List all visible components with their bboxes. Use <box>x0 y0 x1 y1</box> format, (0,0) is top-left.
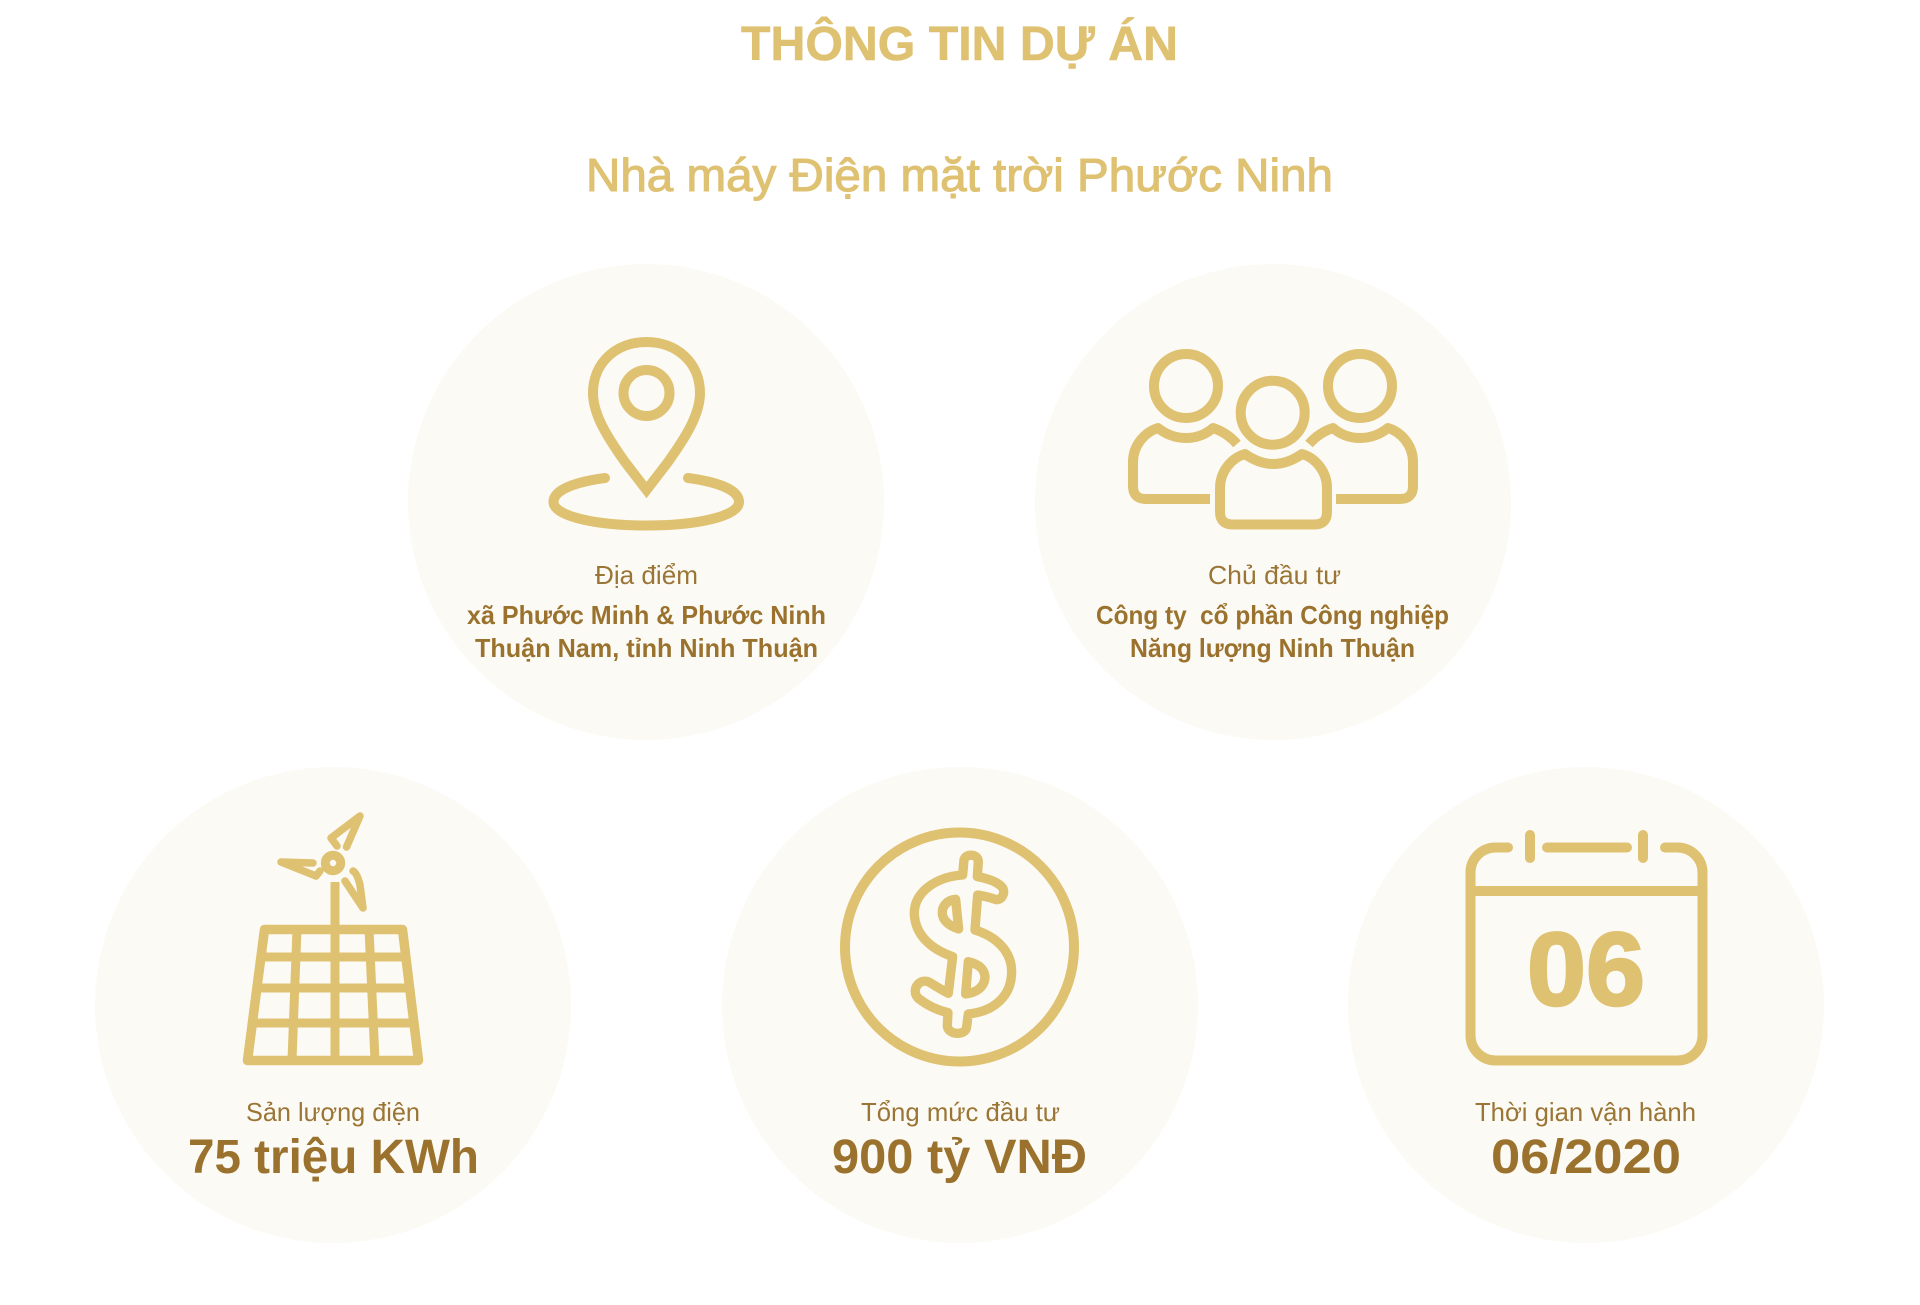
icon: calendar <box>1470 835 1702 1060</box>
panel: operation date <box>1348 767 1824 1243</box>
label: total investment: Tổng mức đầu tư <box>861 1097 1060 1127</box>
panel background circle <box>95 767 571 1243</box>
panel background circle <box>408 264 884 740</box>
icon: wind turbine and solar panel <box>248 816 418 1060</box>
value: electricity output: 75 triệu KWh <box>188 1131 479 1184</box>
icon: three people <box>1133 354 1413 524</box>
panel: location <box>408 264 884 740</box>
title: THÔNG TIN DỰ ÁN <box>741 16 1178 71</box>
label: electricity output: Sản lượng điện <box>246 1097 420 1127</box>
subtitle: Nhà máy Điện mặt trời Phước Ninh <box>586 149 1333 201</box>
value: investor line 2: Năng lượng Ninh Thuận <box>1130 633 1415 663</box>
panel: investor <box>1035 264 1511 740</box>
value: operation date: 06/2020 <box>1491 1131 1681 1184</box>
icon: dollar coin <box>845 832 1074 1062</box>
value: location line 1: xã Phước Minh & Phước Ninh <box>467 600 826 630</box>
label: location: Địa điểm <box>595 560 698 590</box>
value: investor line 1: Công ty cổ phần Công nghiệp <box>1096 600 1449 630</box>
label: operation date: Thời gian vận hành <box>1475 1097 1696 1127</box>
icon: map pin <box>554 342 739 526</box>
panel background circle <box>1348 767 1824 1243</box>
panel background circle <box>722 767 1198 1243</box>
panel: total investment <box>722 767 1198 1243</box>
label: investor: Chủ đầu tư <box>1208 560 1341 590</box>
value: location line 2: Thuận Nam, tỉnh Ninh Thuận <box>475 633 818 663</box>
panel: electricity output <box>95 767 571 1243</box>
value: total investment: 900 tỷ VNĐ <box>832 1131 1087 1184</box>
icon: calendar: 06 <box>1527 912 1645 1028</box>
panel background circle <box>1035 264 1511 740</box>
